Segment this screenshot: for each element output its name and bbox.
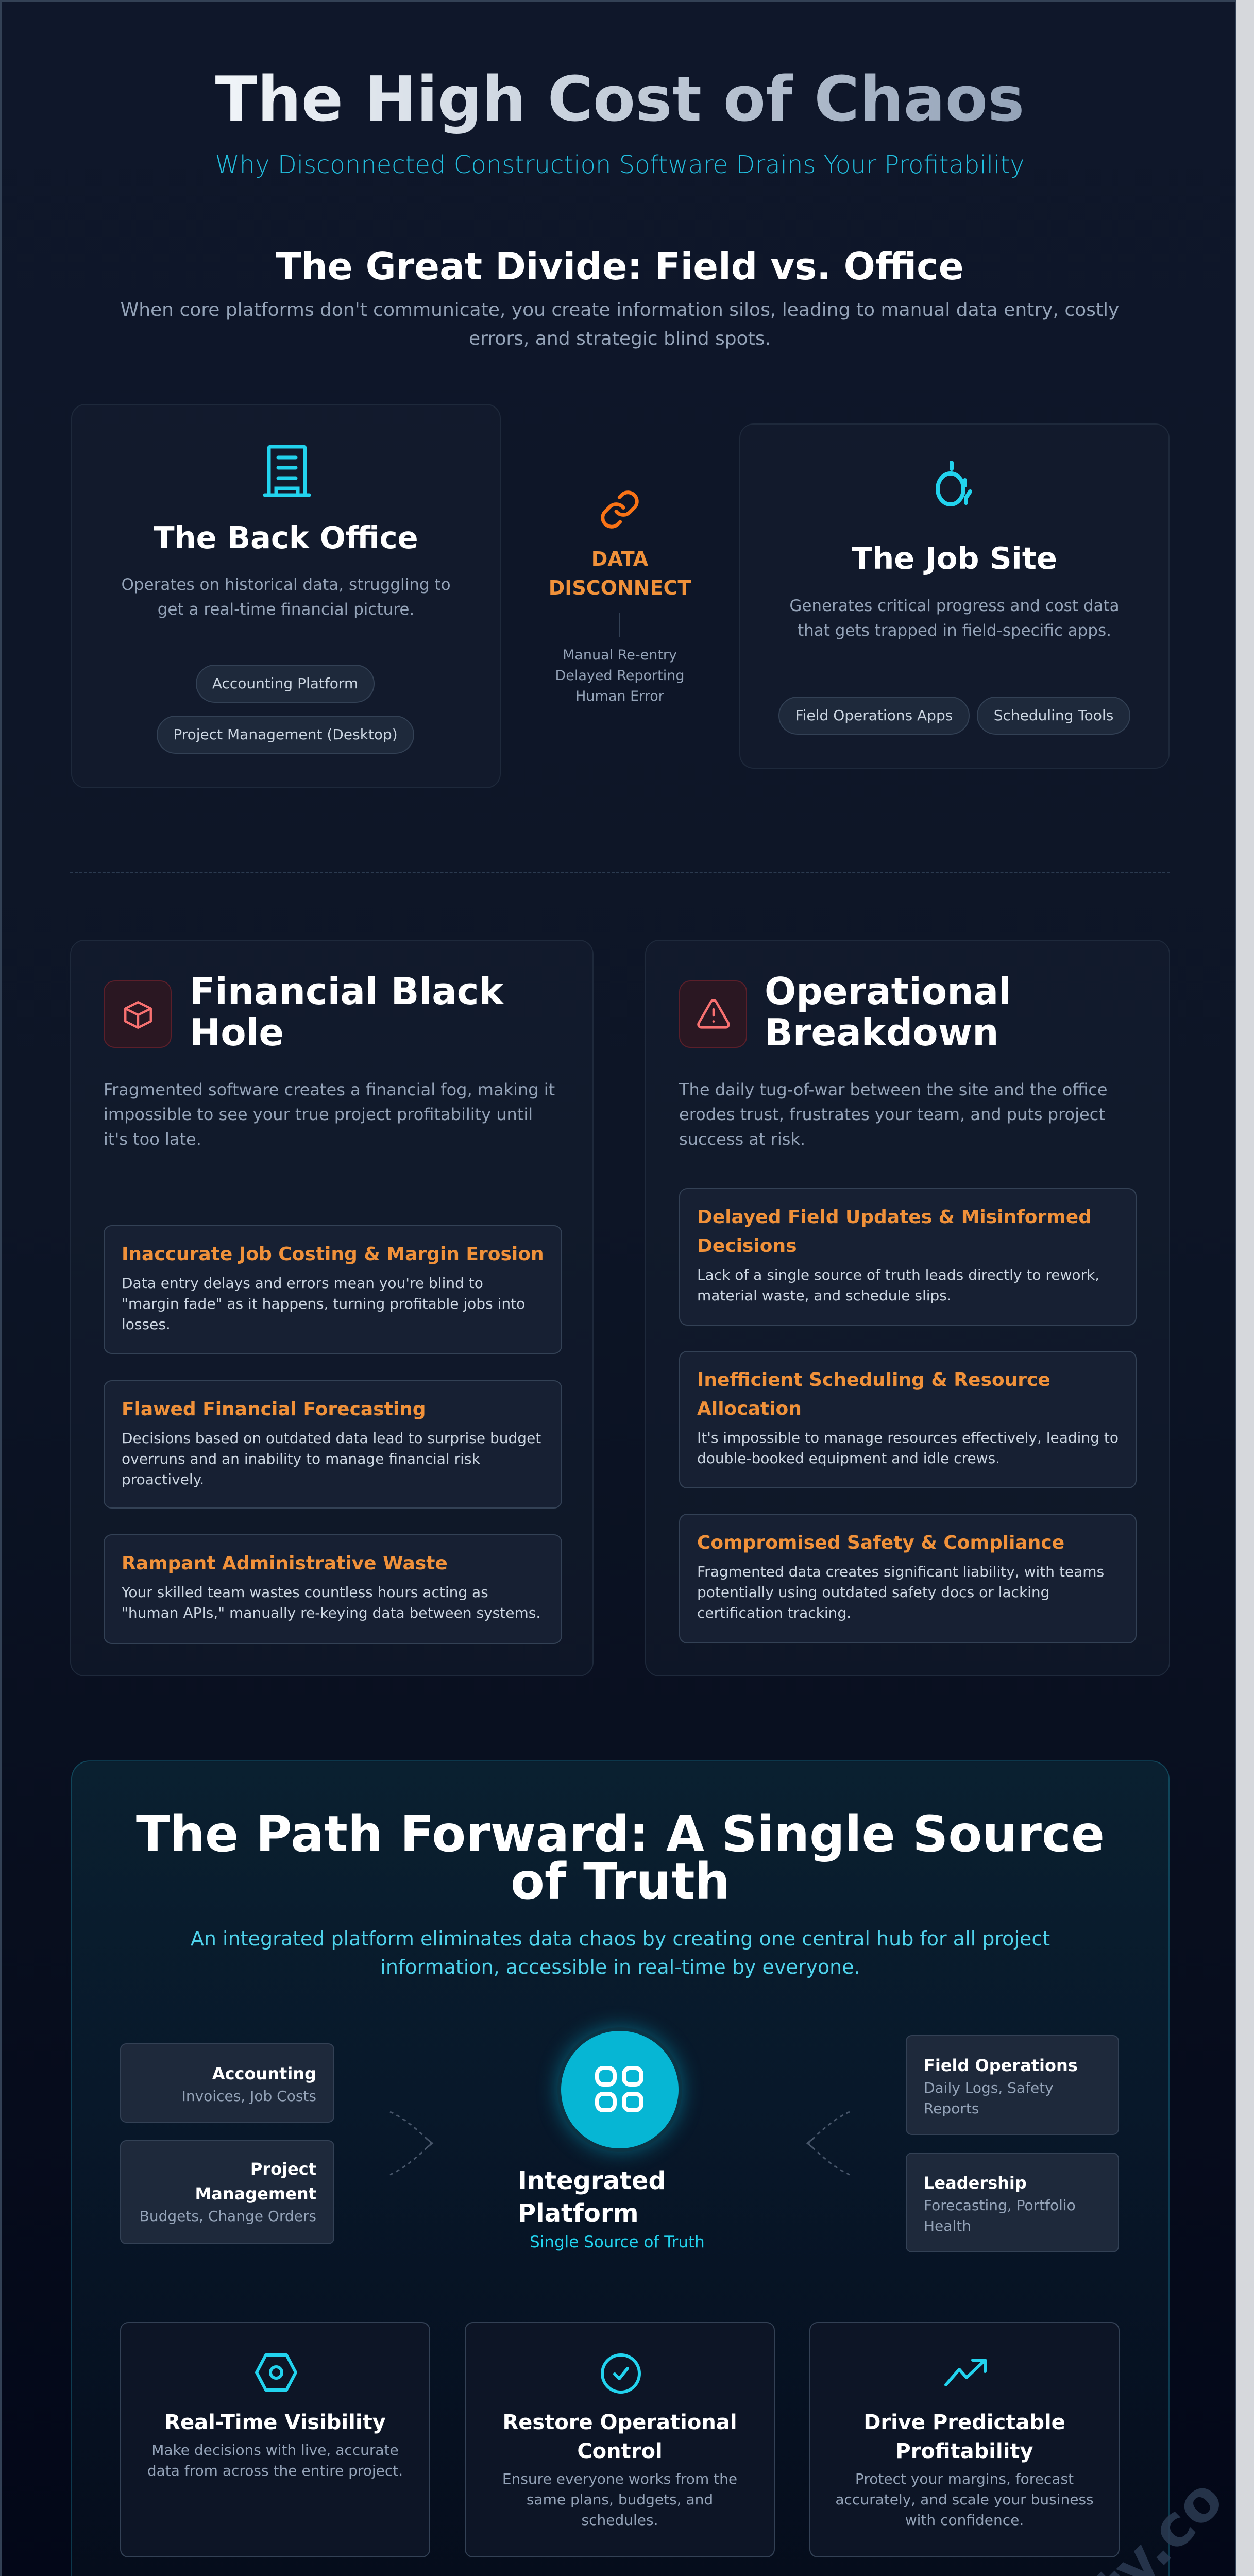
item: compromised safety xyxy=(679,1514,1137,1643)
text: financial description: Fragmented software creates a financial fog, making it xyxy=(104,1080,555,1099)
heading: operational breakdown xyxy=(765,970,1011,1054)
item: delayed field updates: material waste, and schedule slips. xyxy=(697,1287,952,1304)
heading: path forward xyxy=(136,1805,1105,1910)
item: flawed forecasting: Decisions based on outdated data lead to surprise budget xyxy=(122,1430,541,1447)
node: project management: Project xyxy=(250,2159,316,2179)
item: administrative waste: Your skilled team wastes countless hours acting as xyxy=(122,1584,488,1601)
label: single source of truth: Single Source of Truth xyxy=(530,2233,705,2251)
hub: integrated platform xyxy=(557,2027,682,2152)
node: accounting: Invoices, Job Costs xyxy=(182,2088,316,2105)
icon: hard hat xyxy=(936,461,972,506)
text: job site description: that gets trapped in field-specific apps. xyxy=(798,621,1111,640)
text: job site description xyxy=(789,597,1120,640)
item: administrative waste xyxy=(104,1534,562,1644)
icon: broken link xyxy=(601,490,639,529)
icon: check circle xyxy=(601,2353,641,2394)
heading: the back office: The Back Office xyxy=(154,520,418,555)
item: administrative waste: Rampant Administrative Waste xyxy=(122,1553,448,1574)
item: inefficient scheduling: Allocation xyxy=(697,1398,802,1419)
benefit: restore operational control: Ensure everyone works from the xyxy=(502,2470,737,2487)
text: operational description: success at risk. xyxy=(679,1129,805,1149)
heading: financial black hole xyxy=(190,970,504,1054)
item: compromised safety: Fragmented data creates significant liability, with teams xyxy=(697,1563,1104,1580)
item: administrative waste: "human APIs," manually re-keying data between systems. xyxy=(122,1604,540,1621)
benefit: real-time visibility: Make decisions with live, accurate xyxy=(151,2442,399,2459)
panel: financial black hole xyxy=(70,940,594,1676)
text: operational description xyxy=(679,1080,1108,1149)
label: data disconnect: DISCONNECT xyxy=(549,577,691,599)
arrow: right to hub xyxy=(806,2111,850,2175)
benefit: drive predictable profitability xyxy=(809,2322,1120,2557)
section description: errors, and strategic blind spots. xyxy=(469,328,771,349)
benefit: drive predictable profitability: accurately, and scale your business xyxy=(835,2491,1094,2508)
text: financial description: it's too late. xyxy=(104,1129,201,1149)
benefit: drive predictable profitability: Drive Predictable xyxy=(863,2411,1065,2434)
pill: accounting platform: Accounting Platform xyxy=(212,675,358,692)
text: financial description: impossible to see your true project profitability until xyxy=(104,1105,533,1124)
item: flawed forecasting: Flawed Financial Forecasting xyxy=(122,1399,426,1420)
node: field operations: Field Operations xyxy=(924,2056,1078,2075)
text: path forward subtitle xyxy=(191,1927,1050,1978)
text: consequences xyxy=(555,647,684,704)
pill: project management xyxy=(157,716,414,754)
node: accounting: Accounting xyxy=(212,2064,316,2083)
item: delayed field updates: Decisions xyxy=(697,1235,797,1257)
pill: field operations apps: Field Operations Apps xyxy=(795,707,953,724)
text: back office description xyxy=(121,575,451,619)
panel: job site xyxy=(739,423,1170,769)
benefit: restore operational control: same plans, budgets, and xyxy=(527,2491,713,2508)
title: The High Cost of Chaos xyxy=(215,64,1024,135)
icon: hexagon xyxy=(255,2353,297,2392)
text: path forward subtitle: information, accessible in real-time by everyone. xyxy=(380,1956,860,1978)
label: integrated platform: Integrated xyxy=(518,2166,666,2195)
text: operational description: erodes trust, frustrates your team, and puts project xyxy=(679,1105,1105,1124)
heading: path forward: of Truth xyxy=(511,1853,730,1910)
item: delayed field updates xyxy=(679,1188,1137,1326)
node: project management: Budgets, Change Orders xyxy=(140,2208,316,2225)
pill: project management: Project Management (Desktop) xyxy=(173,726,398,743)
benefit: restore operational control: schedules. xyxy=(582,2512,658,2529)
heading: operational breakdown: Operational xyxy=(765,970,1011,1013)
heading: financial black hole: Hole xyxy=(190,1011,284,1054)
node: leadership: Leadership xyxy=(924,2173,1027,2193)
benefit: restore operational control xyxy=(465,2322,775,2557)
text: consequences: Human Error xyxy=(575,688,664,704)
item: delayed field updates: Lack of a single source of truth leads directly to rework, xyxy=(697,1266,1099,1283)
arrow: left to hub xyxy=(389,2111,434,2175)
heading: financial black hole: Financial Black xyxy=(190,970,503,1013)
item: compromised safety: potentially using outdated safety docs or lacking xyxy=(697,1584,1049,1601)
heading: operational breakdown: Breakdown xyxy=(765,1011,998,1054)
text: consequences: Delayed Reporting xyxy=(555,668,684,684)
node: accounting xyxy=(120,2043,334,2123)
node: leadership: Health xyxy=(924,2217,971,2234)
benefit: real-time visibility: Real-Time Visibility xyxy=(164,2411,386,2434)
icon: building xyxy=(263,445,311,497)
item: delayed field updates: Delayed Field Updates & Misinformed xyxy=(697,1207,1092,1228)
node: field operations: Daily Logs, Safety xyxy=(924,2079,1054,2096)
text: consequences: Manual Re-entry xyxy=(563,647,677,663)
icon: trending up xyxy=(944,2359,987,2386)
item: inefficient scheduling: It's impossible to manage resources effectively, leading to xyxy=(697,1429,1119,1446)
item: flawed forecasting: overruns and an inability to manage financial risk xyxy=(122,1450,480,1467)
section heading: great divide: The Great Divide: Field vs. Office xyxy=(276,245,964,288)
pill: scheduling tools: Scheduling Tools xyxy=(994,707,1113,724)
item: inefficient scheduling: Inefficient Scheduling & Resource xyxy=(697,1369,1050,1391)
benefit: restore operational control: Control xyxy=(577,2439,663,2463)
benefit: real-time visibility: data from across the entire project. xyxy=(147,2462,403,2479)
section description: When core platforms don't communicate, you create information silos, leading to manual data entry, costly xyxy=(121,299,1119,320)
benefit: real-time visibility xyxy=(120,2322,430,2557)
panel: operational breakdown xyxy=(645,940,1170,1676)
icon: grid xyxy=(595,2066,643,2112)
heading: path forward: The Path Forward: A Single Source xyxy=(136,1805,1105,1863)
text: back office description: get a real-time financial picture. xyxy=(158,600,414,619)
icon: warning xyxy=(679,980,747,1048)
benefit: drive predictable profitability: Protect your margins, forecast xyxy=(855,2470,1074,2487)
item: inaccurate job costing: losses. xyxy=(122,1316,171,1333)
benefit: drive predictable profitability: with confidence. xyxy=(905,2512,1024,2529)
section description xyxy=(121,299,1119,349)
item: compromised safety: Compromised Safety & Compliance xyxy=(697,1532,1064,1553)
subtitle: Why Disconnected Construction Software Drains Your Profitability xyxy=(215,150,1025,179)
item: flawed forecasting xyxy=(104,1380,562,1509)
label: data disconnect: DATA xyxy=(591,548,648,570)
node: field operations xyxy=(906,2035,1119,2135)
item: flawed forecasting: proactively. xyxy=(122,1471,204,1488)
item: inaccurate job costing: Inaccurate Job Costing & Margin Erosion xyxy=(122,1244,544,1265)
benefit: restore operational control: Restore Operational xyxy=(502,2411,737,2434)
item: inaccurate job costing: "margin fade" as it happens, turning profitable jobs into xyxy=(122,1295,525,1312)
item: inefficient scheduling: double-booked equipment and idle crews. xyxy=(697,1450,1000,1467)
text: operational description: The daily tug-of-war between the site and the office xyxy=(679,1080,1108,1099)
pill: scheduling tools xyxy=(977,697,1130,735)
icon: cube xyxy=(104,980,172,1048)
label: data disconnect xyxy=(549,548,691,599)
item: inefficient scheduling xyxy=(679,1351,1137,1488)
item: inaccurate job costing xyxy=(104,1225,562,1354)
item: inaccurate job costing: Data entry delays and errors mean you're blind to xyxy=(122,1275,483,1292)
node: project management: Management xyxy=(195,2184,316,2204)
label: integrated platform: Platform xyxy=(518,2199,639,2228)
benefit: drive predictable profitability: Profitability xyxy=(895,2439,1033,2463)
text: job site description: Generates critical progress and cost data xyxy=(789,597,1120,615)
panel: path forward xyxy=(71,1760,1170,2576)
pill: accounting platform xyxy=(196,665,375,703)
text: back office description: Operates on historical data, struggling to xyxy=(121,575,451,594)
item: compromised safety: certification tracking. xyxy=(697,1604,851,1621)
node: project management xyxy=(120,2140,334,2244)
text: path forward subtitle: An integrated platform eliminates data chaos by creating one central hub for all project xyxy=(191,1927,1050,1950)
connector: data disconnect xyxy=(549,490,691,704)
node: leadership: Forecasting, Portfolio xyxy=(924,2197,1076,2214)
text: financial description xyxy=(104,1080,555,1149)
node: leadership xyxy=(906,2153,1119,2252)
panel: back office xyxy=(71,404,501,788)
heading: the job site: The Job Site xyxy=(852,540,1057,576)
pill: field operations apps xyxy=(778,697,970,735)
label: integrated platform xyxy=(518,2166,666,2228)
node: field operations: Reports xyxy=(924,2100,979,2117)
